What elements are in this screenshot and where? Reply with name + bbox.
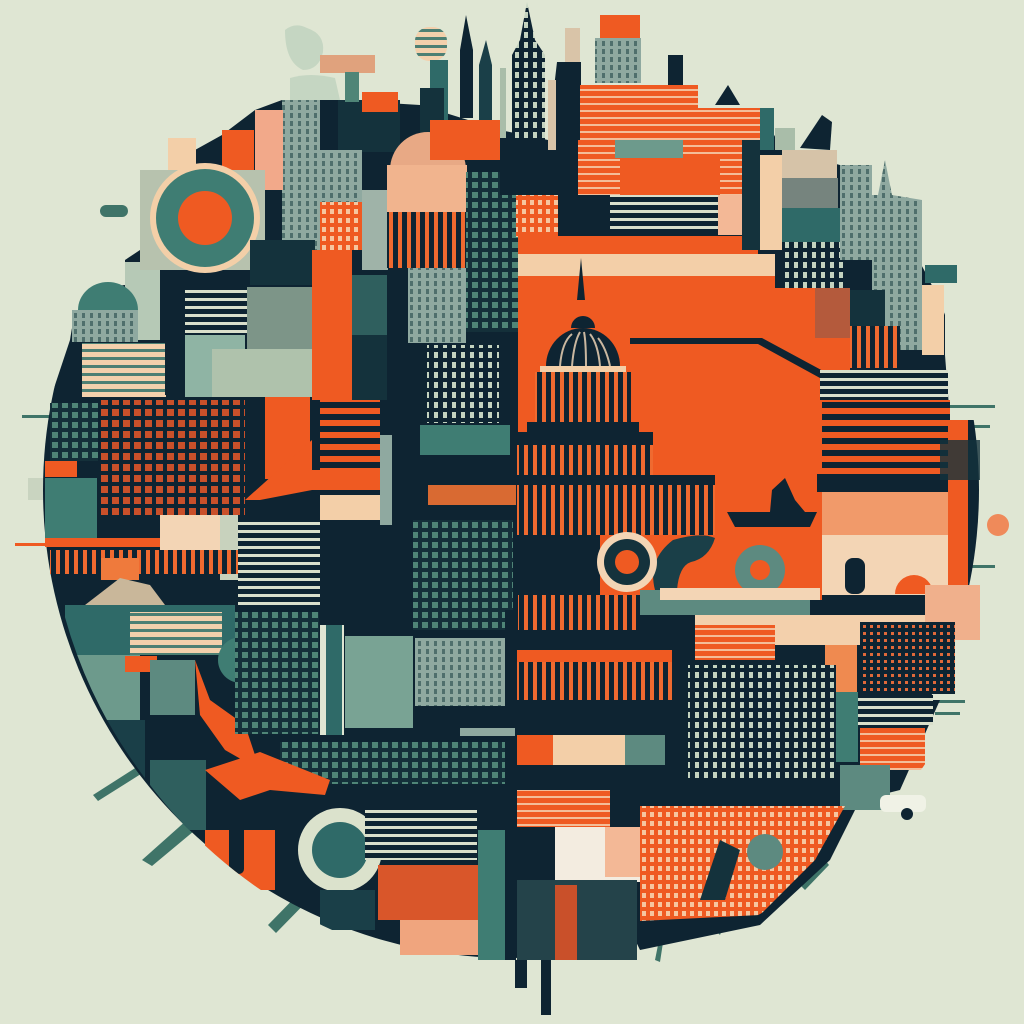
- panel: right side buildings: [817, 265, 980, 595]
- icon: small car: [880, 795, 926, 820]
- panel: center left towers: [45, 335, 516, 630]
- icon: ship: [727, 512, 817, 527]
- icon: dome building: [387, 132, 467, 268]
- panel: top skyline: [168, 2, 832, 265]
- icon: sun disc: [150, 163, 260, 273]
- panel: upper left buildings: [72, 120, 558, 400]
- icon: figure: [229, 830, 244, 874]
- icon: capitol dome: [517, 258, 715, 535]
- icon: donut: [735, 545, 785, 595]
- base: collage silhouette: [43, 62, 979, 958]
- icon: clock: [597, 532, 657, 592]
- panel: capitol and orange field: [517, 140, 922, 600]
- icon: tree: [653, 535, 715, 590]
- edge spikes and debris: [15, 205, 1009, 1015]
- panel: lower collage, clipped to the disc: [60, 585, 980, 960]
- icon: ring gear: [298, 808, 382, 892]
